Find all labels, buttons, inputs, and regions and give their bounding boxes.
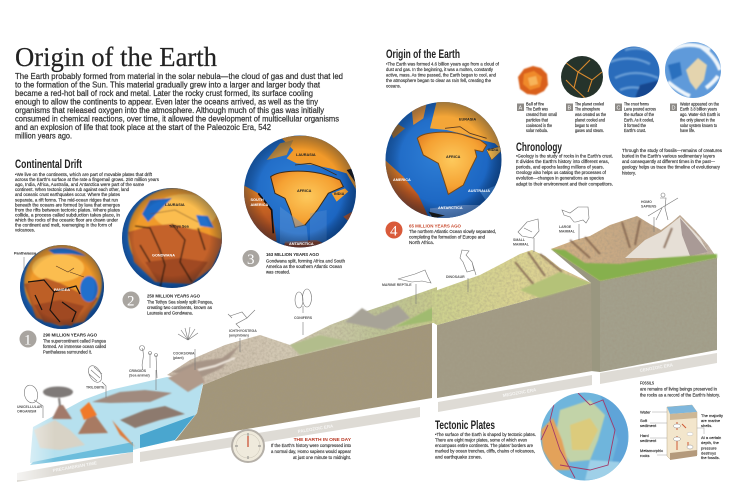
- caption 2: The Tethys Sea slowly split Pangea,: [147, 300, 213, 304]
- intro text block: became a red-hot ball of rock and metal. Later the rocky crust formed, its surface cooling: [15, 88, 313, 98]
- icon: unicellular organism: UNICELLULAR: [17, 405, 42, 409]
- text block: chronology: Geology also helps us catalog the processes of: [516, 170, 607, 175]
- text block: tectonic plates: encompass entire continents. The plates' borders are: [435, 443, 533, 448]
- icon: cooksonia: (plant): [173, 356, 184, 360]
- icon: unicellular organism: ORGANISM: [17, 410, 36, 414]
- diagram: fossil layers: Metamorphic: [640, 448, 663, 453]
- block 2 front face and terrain: paleozoic: [167, 287, 437, 441]
- title: Origin of the Earth: [15, 42, 217, 72]
- heading: Origin of the Earth: Origin of the Earth: [386, 49, 460, 61]
- intro text block: to the formation of the Sun. This material gradually grew into a larger and larger body that: [15, 80, 321, 90]
- text block: chronology: Through the study of fossils—remains of creatures: [622, 148, 723, 153]
- diagram: fossil layers: sediment: [640, 423, 657, 428]
- captions A–D: began to emit: [575, 123, 598, 128]
- captions A–D: C: [616, 106, 620, 112]
- captions A–D: Earth. As it cooled,: [624, 118, 654, 122]
- globe 2: Laurasia and Gondwana: GONDWANA: [152, 254, 175, 258]
- heading: Chronology: Chronology: [516, 142, 562, 154]
- captions A–D: have life.: [680, 128, 695, 133]
- text block: origin: the atmosphere began to clear as rain fell, creating the: [386, 78, 491, 83]
- diagram: fossil layers: pressure: [701, 446, 717, 450]
- diagram: fossil layers: The majority: [701, 413, 723, 418]
- captions A–D: was created as the: [575, 112, 607, 117]
- caption 1: The supercontinent called Pangea: [43, 338, 106, 344]
- caption 2: creating two continents, known as: [147, 305, 213, 310]
- icon: large mammal: LARGE: [559, 225, 572, 229]
- icon: small mammal: MAMMAL: [513, 242, 530, 246]
- captions A–D: it formed the: [624, 123, 647, 128]
- text block: continental drift: the continent and melt, reemerging in the form of: [15, 222, 113, 228]
- globe 3: 163 million years ago: INDIA: [334, 192, 345, 196]
- captions A–D: The crust forms: [624, 102, 650, 106]
- icon: conifers: [294, 289, 313, 335]
- text block: continental drift: [15, 172, 160, 233]
- globe 4: 65 million years ago: AFRICA: [446, 155, 461, 159]
- text block: continental drift: continent. When tectonic plates rub against each other, land: [15, 187, 129, 192]
- intro text block: organisms that released oxygen into the atmosphere. Although much of this gas was initially: [15, 105, 325, 115]
- diagram: fossil layers: Hard: [640, 433, 649, 438]
- text block: origin: [386, 62, 500, 88]
- globe 3: 163 million years ago: AFRICA: [297, 189, 312, 193]
- text block: chronology: buried in the Earth's various sedimentary layers: [622, 154, 716, 158]
- captions A–D: planet cooled and: [575, 118, 606, 122]
- heading: Tectonic Plates: Tectonic Plates: [435, 420, 495, 432]
- caption 1: [20, 330, 106, 354]
- caption 1: 290 MILLION YEARS AGO: [43, 332, 97, 338]
- caption 1: formed. An immense ocean called: [43, 344, 106, 349]
- caption 2: 2: [127, 294, 134, 310]
- captions A–D: Water appeared on the: [680, 102, 720, 106]
- icon: large mammal: [559, 207, 589, 240]
- captions A–D: Earth's crust.: [624, 128, 646, 133]
- block 3: mesozoic: [432, 250, 592, 398]
- caption 3: America as the southern Atlantic Ocean: [266, 264, 342, 269]
- band labels: MESOZOIC ERA: [502, 387, 537, 398]
- diagram: fossil layers: are marine: [701, 418, 721, 423]
- captions A–D: created from small: [526, 112, 557, 117]
- text block: origin: active, mass. As time passed, the Earth began to cool, and: [386, 72, 496, 78]
- caption 4: North Africa.: [409, 240, 434, 245]
- text block: tectonic plates: •The surface of the Earth is shaped by tectonic plates.: [435, 432, 536, 437]
- diagram: fossil layers: Soft: [640, 418, 648, 423]
- text block: chronology: and consequently at different times in the past—: [622, 159, 715, 164]
- icon: ichthyostega: [228, 310, 257, 352]
- diagram: fossil layers: At a certain: [701, 435, 721, 440]
- globe 2: Laurasia and Gondwana: [122, 188, 224, 288]
- text: fossils: [640, 380, 720, 398]
- caption 4: 65 MILLION YEARS AGO: [409, 224, 461, 230]
- globe 3: 163 million years ago: AMERICA: [250, 203, 268, 207]
- text block: tectonic plates: [435, 432, 536, 460]
- globe 4: 65 million years ago: INDIA: [488, 148, 499, 152]
- callout: the earth in one day: THE EARTH IN ONE DAY: [294, 437, 352, 443]
- islands: [34, 365, 205, 450]
- band labels: [52, 362, 674, 473]
- diagram: fossil layers: sediment: [640, 438, 657, 443]
- captions A–D: B: [568, 106, 572, 112]
- icon: conifers: CONIFERS: [294, 316, 313, 320]
- globe 4: 65 million years ago: ANTARCTICA: [438, 206, 463, 210]
- text block: continental drift: from the rifts between tectonic plates. Where plates: [15, 207, 121, 212]
- captions A–D: Earth 3.8 billion years: [680, 106, 717, 112]
- icon: crinoids: [129, 346, 158, 390]
- caption 3: Gondwana split, forming Africa and South: [266, 258, 345, 264]
- text block: tectonic plates: There are eight major plates, some of which even: [435, 438, 527, 442]
- captions A–D: the only planet in the: [680, 118, 716, 122]
- globe 1: Pangea: [20, 244, 104, 329]
- clock: the earth in one day: [232, 430, 264, 462]
- caption 1: 1: [24, 332, 32, 348]
- icon: small mammal: [513, 219, 539, 252]
- captions A–D: particles that: [526, 118, 549, 122]
- captions A–D: A: [518, 106, 522, 112]
- text block: chronology: It divides the Earth's history into different eras,: [516, 159, 609, 164]
- intro text block: million years ago.: [15, 130, 72, 140]
- captions A–D: The atmosphere: [575, 106, 601, 112]
- icon: homo sapiens: [641, 193, 678, 232]
- landscape: geological blocks: [0, 215, 717, 480]
- icon: small mammal: SMALL: [513, 238, 526, 242]
- icon: ichthyostega: (amphibian): [229, 334, 249, 338]
- text block: chronology: history.: [622, 170, 636, 176]
- captions A–D: D: [672, 106, 676, 112]
- text block: chronology: adapt to their environment and their competitors.: [516, 182, 613, 186]
- globe 4: 65 million years ago: AUSTRALIA: [468, 189, 490, 193]
- text block: continental drift: •We live on the continents, which are part of movable plates that drift: [15, 172, 153, 177]
- icon: cooksonia: [173, 327, 198, 370]
- text block: origin: •The Earth was formed 4.6 billion years ago from a cloud of: [386, 62, 500, 66]
- text block: tectonic plates: and earthquake zones.: [435, 454, 482, 460]
- band labels: CENOZOIC ERA: [639, 362, 674, 373]
- globe: tectonic plates: [540, 392, 628, 480]
- text block: chronology: periods, and epochs lasting millions of years.: [516, 164, 604, 170]
- globe 2: Laurasia and Gondwana: Tethys Sea: [169, 224, 190, 228]
- callout: the earth in one day: [271, 437, 352, 460]
- icon: ichthyostega: ICHTHYOSTEGA: [229, 329, 257, 333]
- text block: continental drift: collide, a process called subduction takes place, in: [15, 212, 120, 217]
- globe 3: 163 million years ago: [244, 136, 356, 248]
- diagram: fossil layers: [640, 405, 723, 460]
- icon: large mammal: MAMMAL: [559, 230, 576, 234]
- captions A–D: The planet cooled: [575, 102, 604, 106]
- caption 3: was created.: [266, 270, 290, 274]
- icon: homo sapiens: SAPIENS: [641, 204, 657, 208]
- text block: origin: oceans.: [386, 84, 401, 88]
- label: Panthalassa: Panthalassa: [14, 252, 37, 256]
- text block: continental drift: separate, a rift forms. The mid-ocean ridges that run: [15, 197, 118, 202]
- globe 3: 163 million years ago: ANTARCTICA: [289, 242, 314, 246]
- captions A–D: The Earth was: [526, 106, 548, 112]
- captions A–D: solar nebula.: [526, 128, 548, 133]
- icon: trilobite: [86, 363, 106, 398]
- text block: chronology: [516, 148, 723, 186]
- text block: chronology: geology helps us trace the timeline of evolutionary: [622, 164, 721, 170]
- callout: the earth in one day: at just one minute to midnight.: [293, 455, 351, 460]
- globe 4: 65 million years ago: EURASIA: [459, 118, 476, 122]
- caption 4: 4: [390, 224, 398, 240]
- caption 4: The northern Atlantic Ocean slowly separated,: [409, 229, 496, 234]
- intro text block: [15, 71, 343, 140]
- diagram: fossil layers: rocks: [640, 453, 650, 458]
- text block: tectonic plates: marked by ocean trenches, cliffs, chains of volcanoes,: [435, 448, 535, 454]
- globe 3: 163 million years ago: SOUTH: [250, 198, 264, 202]
- globe 1: Pangea: PANGEA: [54, 288, 70, 292]
- caption 4: completing the formation of Europe and: [409, 234, 485, 240]
- text: fossils: FOSSILS: [640, 380, 654, 386]
- caption 1: Panthalassa surrounded it.: [43, 350, 92, 354]
- text block: continental drift: across the Earth's surface at the rate a fingernail grows. 250 million years: [15, 177, 160, 182]
- caption 3: 3: [247, 252, 254, 268]
- small globe B: planet cooled: [561, 56, 603, 98]
- icon: crinoids: CRINOIDS: [129, 369, 147, 373]
- small globe A: ball of fire: [518, 66, 548, 95]
- text block: chronology: •Geology is the study of rocks in the Earth's crust.: [516, 154, 613, 158]
- diagram: fossil layers: destroys: [701, 450, 716, 456]
- small globe D: water: [665, 42, 721, 98]
- diagram: fossil layers: shells.: [701, 423, 712, 428]
- globe 3: 163 million years ago: LAURASIA: [296, 153, 316, 157]
- callout: the earth in one day: a normal day, Homo sapiens would appear: [271, 449, 351, 454]
- globe 4: 65 million years ago: AMERICA: [393, 178, 411, 182]
- caption 2: Laurasia and Gondwana.: [147, 310, 193, 316]
- icon: cooksonia: COOKSONIA: [173, 352, 195, 356]
- caption 2: [122, 292, 213, 316]
- callout: the earth in one day: If the Earth's history were compressed into: [271, 443, 351, 448]
- diagram: fossil layers: the fossils.: [701, 455, 720, 460]
- intro text block: consumed in chemical reactions, over time, it allowed the development of multicellular organisms: [15, 114, 339, 124]
- heading: Continental Drift: Continental Drift: [15, 159, 82, 171]
- icon: unicellular organism: [17, 384, 43, 418]
- icon: dinosaur: [446, 250, 476, 292]
- text: fossils: are remains of living beings preserved in: [640, 386, 717, 392]
- small globe C: crust forms: [608, 46, 660, 98]
- caption 4: [386, 222, 496, 245]
- globe 4: 65 million years ago: [385, 102, 503, 218]
- icon: homo sapiens: HOMO: [641, 200, 652, 204]
- captions A–D: the surface of the: [624, 112, 655, 117]
- text block: continental drift: beneath the oceans are formed by lava that emerges: [15, 202, 121, 207]
- block 1: precambrian sea: [0, 365, 205, 480]
- band labels: PALEOZOIC ERA: [297, 423, 334, 434]
- captions A–D: Ball of fire: [526, 102, 545, 106]
- caption 3: [242, 250, 345, 274]
- text block: continental drift: and oceanic crust earthquakes occur. Where the plates: [15, 192, 121, 197]
- text block: continental drift: ago, India, Africa, Australia, and Antarctica were part of the same: [15, 182, 144, 187]
- captions A–D: ago. Water-rich Earth is: [680, 112, 720, 117]
- icon: trilobite: TRILOBITE: [86, 386, 105, 390]
- caption 2: 250 MILLION YEARS AGO: [147, 294, 200, 300]
- diagram: fossil layers: depth, the: [701, 440, 720, 445]
- icon: dinosaur: DINOSAUR: [446, 275, 465, 279]
- text block: continental drift: volcanoes.: [15, 228, 35, 233]
- icon: marine reptile: [382, 270, 431, 304]
- timeline bands: [17, 353, 717, 482]
- intro text block: The Earth probably formed from material in the solar nebula—the cloud of gas and dust that led: [15, 71, 343, 81]
- captions A–D: coalesced in the: [526, 123, 553, 128]
- text block: origin: dust and gas. In the beginning, it was a molten, constantly: [386, 67, 494, 72]
- captions A–D: solar system known to: [680, 123, 718, 128]
- block 4: cenozoic: [551, 215, 717, 372]
- captions A–D: Lava poured across: [624, 106, 656, 112]
- diagram: fossil layers: Water: [640, 410, 651, 414]
- text block: chronology: evolution—changes in generations as species: [516, 176, 605, 180]
- icon: marine reptile: MARINE REPTILE: [382, 283, 412, 287]
- text block: continental drift: which the rocks of the oceanic floor are drawn under: [15, 218, 118, 222]
- icon: crinoids: (Sea animal): [129, 374, 150, 378]
- globe 2: Laurasia and Gondwana: LAURASIA: [165, 203, 185, 207]
- captions A–D: [517, 102, 720, 133]
- intro text block: and an explosion of life that took place at the start of the Paleozoic Era, 542: [15, 122, 271, 132]
- captions A–D: gases and steam.: [575, 128, 604, 133]
- intro text block: enough to allow the continents to appear. Even later the oceans arrived, as well as the tiny: [15, 96, 319, 106]
- text: fossils: the rocks as a record of the Earth's history.: [640, 392, 720, 398]
- band labels: PRECAMBRIAN TIME: [52, 460, 97, 473]
- label: Panthalassa: [14, 252, 37, 270]
- caption 3: 163 MILLION YEARS AGO: [266, 252, 319, 258]
